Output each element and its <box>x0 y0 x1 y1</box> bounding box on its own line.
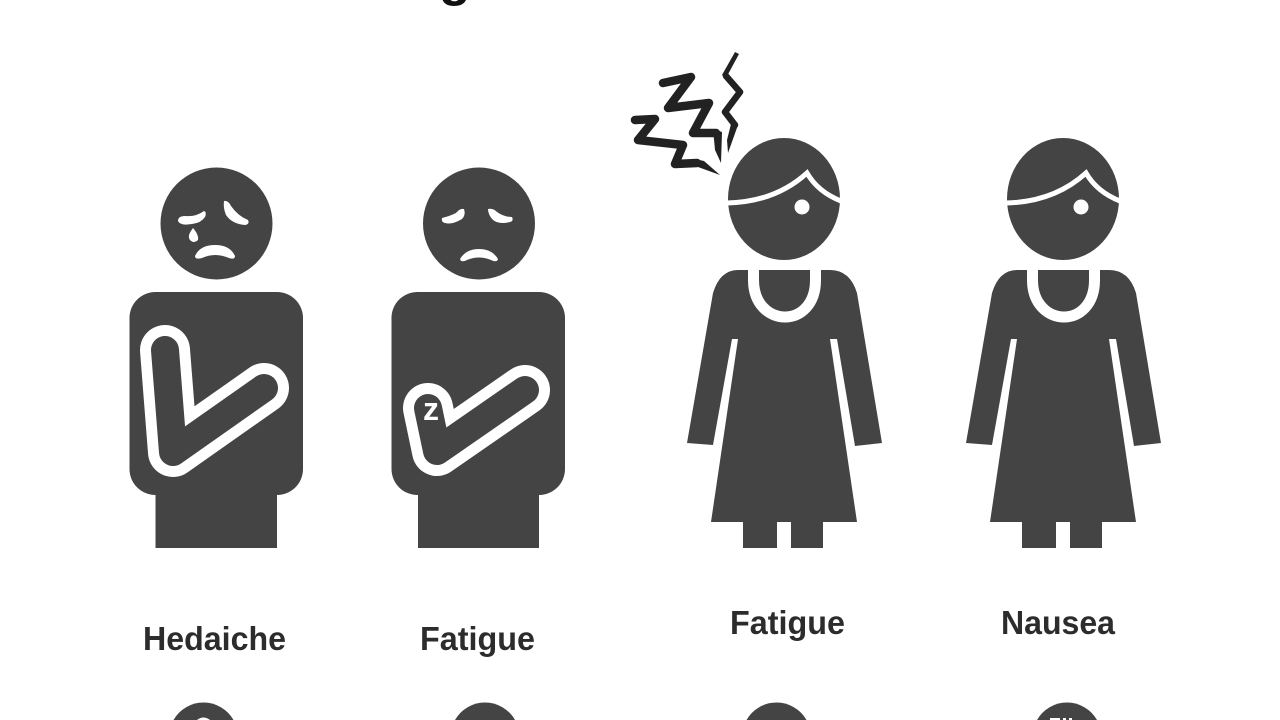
icon: bottom badge 1 <box>174 703 234 720</box>
label: Nausea: Nausea <box>1001 604 1116 641</box>
icon: head with hair <box>727 138 841 260</box>
figure: woman with fatigue <box>687 138 882 548</box>
icon: bottom badge 3 <box>746 703 806 720</box>
icon: head with hair <box>1006 138 1120 260</box>
icon: short arm with sleep mark <box>423 390 525 451</box>
figure: man with headache <box>130 168 303 548</box>
icon: bottom badge 2 <box>455 703 515 720</box>
dress <box>966 270 1161 548</box>
icon: stress zigzags <box>635 52 740 175</box>
icon: sad crying face <box>160 168 272 280</box>
icon: bottom badge 4 <box>1037 703 1097 720</box>
necklace <box>1032 266 1094 317</box>
label: Fatigue: Fatigue <box>730 604 845 641</box>
necklace <box>754 266 816 317</box>
icon: short arm with sleep mark: z <box>423 391 439 427</box>
label: Fatigue: Fatigue <box>420 620 535 657</box>
body <box>392 292 565 548</box>
figure: woman with nausea <box>966 138 1161 548</box>
body <box>130 292 303 548</box>
icon: outlined arm <box>165 350 264 452</box>
icon: sad face <box>423 168 535 280</box>
label: Hedaiche: Hedaiche <box>143 620 286 657</box>
figure: man with fatigue <box>392 168 565 548</box>
dress <box>687 270 882 548</box>
